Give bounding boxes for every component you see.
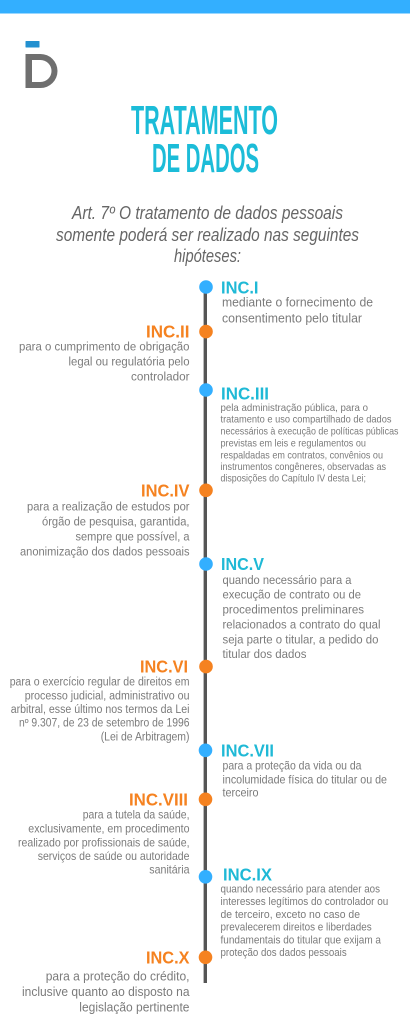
timeline dot X	[199, 950, 212, 964]
title	[131, 97, 278, 181]
timeline dot IX	[199, 870, 212, 884]
timeline dot VI	[199, 660, 213, 673]
intro text: hipóteses:	[174, 246, 241, 266]
item: INC.II: para o cumprimento de obrigação	[19, 340, 190, 354]
item: INC.VII: incolumidade física do titular ou de	[222, 772, 387, 786]
item: INC.IX: proteção dos dados pessoais	[220, 947, 347, 959]
item: INC.III: previstas em leis e regulamentos ou	[220, 438, 366, 449]
item: INC.X: INC.X	[146, 947, 190, 967]
item: INC.IV: para a realização de estudos por	[27, 500, 190, 514]
item: INC.VIII	[18, 789, 190, 877]
item: INC.IV	[20, 481, 190, 558]
item: INC.V: relacionados a contrato do qual	[222, 618, 380, 632]
item: INC.VII: INC.VII	[221, 741, 274, 761]
item: INC.VII	[221, 741, 387, 800]
item: INC.IX: interesses legítimos do controlador ou	[220, 896, 388, 908]
intro text: somente poderá ser realizado nas seguintes	[56, 225, 359, 245]
item: INC.VI: INC.VI	[140, 657, 188, 677]
item: INC.VI	[10, 657, 190, 743]
item: INC.II: controlador	[131, 370, 190, 384]
item: INC.VIII: para a tutela da saúde,	[83, 808, 190, 822]
item: INC.IX: quando necessário para atender aos	[220, 883, 380, 895]
item: INC.III: tratamento e uso compartilhado de dados	[220, 415, 392, 426]
timeline dot II	[199, 325, 213, 338]
item: INC.III: pela administração pública, para o	[220, 403, 368, 414]
item: INC.VIII: serviços de saúde ou autoridade	[38, 849, 190, 863]
item: INC.X: para a proteção do crédito,	[46, 968, 190, 983]
item: INC.VI: nº 9.307, de 23 de setembro de 1996	[19, 718, 190, 730]
timeline dot V	[199, 557, 213, 571]
top bar	[0, 0, 410, 14]
item: INC.II: legal ou regulatória pelo	[68, 355, 190, 369]
item: INC.IV: sempre que possível, a	[76, 530, 190, 544]
item: INC.II: INC.II	[146, 322, 190, 342]
item: INC.IX: prevalecerem direitos e liberdades	[220, 922, 372, 934]
item: INC.I: INC.I	[221, 277, 258, 297]
item: INC.IX	[220, 865, 388, 959]
item: INC.I: mediante o fornecimento de	[222, 295, 373, 310]
item: INC.X: inclusive quanto ao disposto na	[22, 984, 190, 999]
item: INC.VII: terceiro	[222, 786, 259, 800]
icon: logo	[26, 41, 58, 88]
item: INC.V	[221, 554, 380, 661]
item: INC.VI: (Lei de Arbitragem)	[101, 731, 190, 743]
item: INC.VIII: sanitária	[149, 863, 190, 877]
timeline dot III	[199, 383, 213, 397]
item: INC.V: INC.V	[221, 554, 264, 574]
item: INC.VIII: exclusivamente, em procedimento	[28, 822, 190, 836]
item: INC.VI: processo judicial, administrativo ou	[25, 690, 190, 702]
item: INC.III: respaldadas em contratos, convênios ou	[220, 450, 383, 461]
item: INC.III: instrumentos congêneres, observadas as	[220, 462, 386, 473]
timeline dot I	[199, 280, 213, 294]
item: INC.I	[221, 277, 373, 326]
title: DE DADOS	[152, 135, 259, 181]
timeline dot VII	[199, 744, 212, 757]
item: INC.VIII: realizado por profissionais de saúde,	[18, 835, 190, 849]
item: INC.IX: de terceiro, exceto no caso de	[220, 909, 360, 921]
title: TRATAMENTO	[131, 97, 278, 143]
item: INC.IX: fundamentais do titular que exijam a	[220, 934, 382, 946]
item: INC.VI: para o exercício regular de direitos em	[10, 676, 190, 688]
item: INC.IV: anonimização dos dados pessoais	[20, 544, 190, 558]
item: INC.V: titular dos dados	[222, 647, 306, 661]
item: INC.IX: INC.IX	[223, 865, 272, 885]
item: INC.X	[22, 947, 190, 1015]
item: INC.V: execução de contrato ou de	[222, 588, 361, 602]
timeline dot VIII	[199, 792, 212, 806]
item: INC.VII: para a proteção da vida ou da	[222, 758, 362, 772]
item: INC.V: procedimentos preliminares	[222, 603, 364, 617]
intro text: Art. 7º O tratamento de dados pessoais	[71, 203, 343, 223]
item: INC.III: INC.III	[221, 383, 269, 403]
item: INC.II	[19, 322, 190, 384]
timeline dot IV	[199, 484, 213, 497]
item: INC.III: disposições do Capítulo IV desta Lei;	[220, 474, 366, 485]
item: INC.IV: órgão de pesquisa, garantida,	[42, 515, 190, 529]
item: INC.V: seja parte o titular, a pedido do	[222, 633, 379, 647]
item: INC.V: quando necessário para a	[222, 573, 352, 587]
item: INC.I: consentimento pelo titular	[222, 311, 363, 326]
intro text	[56, 203, 359, 266]
item: INC.IV: INC.IV	[141, 481, 190, 501]
item: INC.VI: arbitral, esse último nos termos da Lei	[11, 704, 190, 716]
timeline line	[204, 287, 207, 983]
item: INC.VIII: INC.VIII	[129, 789, 188, 809]
item: INC.X: legislação pertinente	[79, 1000, 190, 1015]
item: INC.III	[220, 383, 398, 485]
